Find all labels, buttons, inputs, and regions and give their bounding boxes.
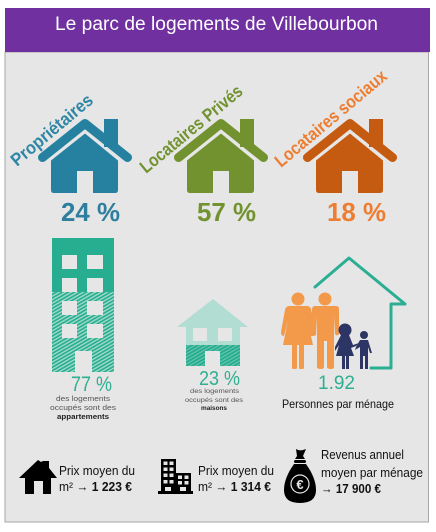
text: revenus annuel: moyen par ménage [321, 466, 423, 480]
text: prix moyen appartement [198, 464, 274, 494]
stat: 18 %: 18 % [327, 197, 386, 227]
stat: 77 % apartments: appartements [57, 414, 109, 421]
icon: house locataires sociaux [308, 119, 392, 193]
stat: 57 %: 57 % [197, 197, 256, 227]
stat: 77 % apartments: occupés sont des [50, 405, 117, 412]
text: prix moyen maison [59, 464, 135, 494]
icon: house locataires privés [178, 119, 264, 193]
text: prix moyen maison: m² → 1 223 € [59, 480, 132, 494]
stat: 77 % apartments: 77 % [71, 373, 112, 396]
stat: 24 %: 24 % [61, 197, 120, 227]
header: title [5, 8, 430, 52]
icon: house propriétaires [42, 119, 128, 193]
stat: 77 % apartments: des logements [56, 396, 111, 403]
header: title: Le parc de logements de Villebourbon [55, 14, 378, 35]
stat: 23 % houses: occupés sont des [185, 397, 244, 404]
text: prix moyen appartement: m² → 1 314 € [198, 480, 271, 494]
stat: 1.92: 1.92 [318, 372, 355, 394]
icon: apartment building 77 % [52, 238, 114, 372]
icon: small house 23 % [177, 299, 248, 366]
stat: 23 % houses: des logements [190, 388, 240, 395]
text: prix moyen appartement: Prix moyen du [198, 464, 274, 478]
stat: 23 % houses: 23 % [199, 368, 240, 390]
icon: black house [19, 460, 57, 494]
label: Locataires sociaux: Locataires sociaux [271, 66, 391, 171]
icon: money bag [284, 449, 316, 503]
stat: 23 % houses: maisons [201, 405, 227, 412]
icon: black building [158, 459, 193, 494]
text: revenus annuel: Revenus annuel [321, 448, 404, 462]
text: revenus annuel [321, 448, 423, 496]
label: Propriétaires: Propriétaires [7, 90, 97, 170]
text: prix moyen maison: Prix moyen du [59, 464, 135, 478]
label: Locataires Privés: Locataires Privés [136, 81, 247, 177]
icon: money bag: € [296, 477, 304, 492]
icon: family in house [281, 258, 405, 369]
label: personnes par ménage: Personnes par ménage [282, 397, 394, 411]
text: revenus annuel: → 17 900 € [321, 482, 381, 496]
stat: 77 % apartments [50, 373, 117, 421]
stat: 23 % houses [185, 368, 244, 412]
